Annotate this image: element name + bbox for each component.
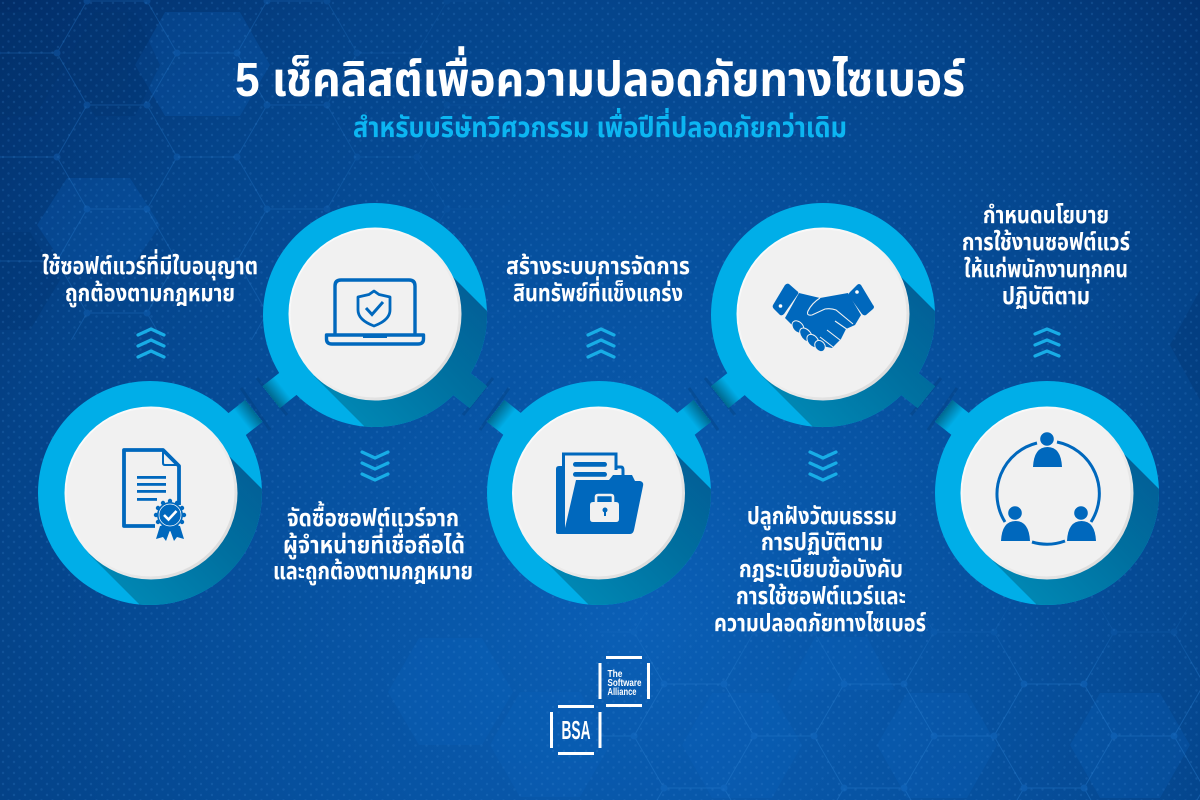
- text: step 5: กำหนดนโยบาย: [983, 202, 1109, 229]
- icon: laptop with shield: [326, 280, 424, 344]
- text: step 2: และถูกต้องตามกฎหมาย: [273, 557, 473, 586]
- title: 5 เช็คลิสต์เพื่อความปลอดภัยทางไซเบอร์: [235, 46, 965, 107]
- text: step 2: จัดซื้อซอฟต์แวร์จาก: [287, 501, 459, 532]
- icon: certified document: [124, 450, 186, 541]
- logo: The Software Alliance: The: [608, 669, 623, 680]
- text: step 2: [273, 501, 473, 586]
- white discs: [64, 228, 1134, 580]
- logo: BSA: [550, 705, 602, 755]
- text: step 3: สร้างระบบการจัดการ: [506, 252, 690, 280]
- arrow: step 3 up chevrons: [588, 329, 614, 357]
- text: step 5: [962, 202, 1130, 310]
- icon: handshake: [773, 284, 874, 354]
- text: step 4: การปฏิบัติตาม: [761, 529, 883, 556]
- long shadows: [89, 277, 1159, 605]
- logo: The Software Alliance: [598, 656, 650, 707]
- text: step 1: ใช้ซอฟต์แวร์ที่มีใบอนุญาต: [42, 249, 258, 281]
- text: step 4: ปลูกฝังวัฒนธรรม: [747, 503, 897, 531]
- icon: folder with lock: [556, 454, 643, 534]
- arrow: step 1 up chevrons: [138, 329, 164, 357]
- panel: step 5 disc: [935, 381, 1159, 605]
- text: step 3: [506, 252, 690, 307]
- panel: step 4 disc: [711, 203, 935, 427]
- logo: The Software Alliance: Alliance: [608, 687, 637, 698]
- panel: step 1 disc: [38, 381, 262, 605]
- connector bands: [150, 315, 1047, 493]
- text: step 5: ปฏิบัติตาม: [1002, 283, 1090, 310]
- text: step 1: [42, 249, 258, 308]
- text: step 1: ถูกต้องตามกฎหมาย: [65, 279, 235, 308]
- panel: step 2 disc: [263, 203, 487, 427]
- icon: people circle: [997, 432, 1099, 544]
- text: step 4: ความปลอดภัยทางไซเบอร์: [714, 610, 926, 637]
- panel: step 3 disc: [487, 381, 711, 605]
- text: step 2: ผู้จำหน่ายที่เชื่อถือได้: [283, 528, 465, 560]
- text: step 5: การใช้งานซอฟต์แวร์: [962, 228, 1130, 256]
- logo: BSA: BSA: [562, 715, 591, 745]
- text: step 4: การใช้ซอฟต์แวร์และ: [736, 582, 906, 610]
- text: step 3: สินทรัพย์ที่แข็งแกร่ง: [513, 276, 683, 307]
- text: step 5: ให้แก่พนักงานทุกคน: [964, 255, 1128, 284]
- arrow: step 2 down chevrons: [362, 452, 388, 480]
- subtitle: สำหรับบริษัทวิศวกรรม เพื่อปีที่ปลอดภัยกว่าเดิม: [353, 107, 847, 143]
- logo: The Software Alliance: Software: [608, 678, 642, 689]
- arrow: step 4 down chevrons: [810, 452, 836, 480]
- text: step 4: กฎระเบียบข้อบังคับ: [739, 555, 903, 583]
- text: step 4: [714, 503, 926, 637]
- arrow: step 5 up chevrons: [1035, 329, 1059, 356]
